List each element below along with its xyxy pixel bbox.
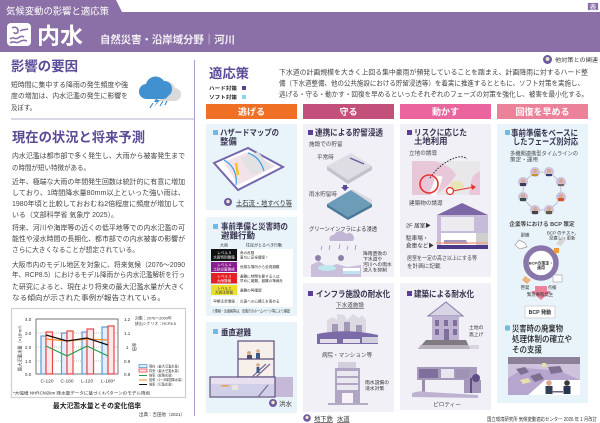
illustration: green infrastructure	[311, 231, 361, 277]
chart axes labels: 1.2	[124, 317, 131, 322]
panel: building flood proofing	[400, 283, 491, 410]
text: status body: さらに大きくなることが想定されている。	[12, 245, 139, 254]
text: status body: 1980年頃と比較しておおむね2倍程度に頻度が増加して	[12, 199, 185, 208]
table: warning levels: 大雨警報	[217, 278, 232, 283]
text: piloti: ピロティー	[433, 402, 461, 408]
panel divider	[194, 60, 196, 416]
panel: phase-based response: したフェーズ別対応	[513, 136, 579, 146]
text: hospital and apartment: 病院・マンション等	[322, 351, 373, 359]
link: subway and water supply: 地下鉄	[314, 414, 334, 423]
chart scenario note	[135, 316, 176, 326]
text: adaptation intro: 下水道の計画規模を大きく上回る集中豪雨が頻発していることを踏まえ、計画降雨に対するハード整	[279, 68, 588, 76]
panel: phase-based response: 策定・運用	[510, 156, 538, 164]
text: normal time: 平常時	[317, 153, 334, 161]
labels: BCP cycle	[521, 230, 579, 298]
panel: phase-based response: その支援	[512, 344, 542, 354]
labels: BCP cycle: 見直し・更新	[549, 234, 576, 242]
chart axes labels: C-180	[60, 378, 74, 384]
table: warning levels: ※警報・注意報等は、気象庁のホームページ等により確認	[212, 308, 290, 314]
panel: causes of impact	[11, 58, 181, 112]
text: adaptation intro	[279, 68, 588, 98]
chart axes labels: 0.9	[124, 359, 131, 364]
labels: BCP cycle: 緊急事態発生	[527, 291, 554, 298]
text: facility storage: 施設での貯留	[309, 140, 343, 148]
panel: preparation and evacuation	[206, 217, 297, 316]
chart axes labels: 0.0	[25, 372, 32, 377]
heading: adaptation measures: 適応策	[209, 66, 249, 81]
box: BCP activation	[525, 306, 555, 318]
chart axes labels: 倍率	[131, 342, 138, 351]
note: rainwater equipment: 雨水設備の	[365, 379, 389, 386]
labels: BCP cycle: 運用	[537, 264, 545, 270]
illustration: flooded building	[210, 341, 293, 397]
panel: infrastructure flood proofing	[303, 283, 394, 412]
labels: BCP cycle: 訓練	[521, 232, 530, 238]
chart source: 出典：吉田他（2021）	[139, 411, 185, 418]
arrow: down	[341, 185, 349, 191]
note: suppress runoff: 降雨直後の	[363, 250, 387, 257]
panel: phase-based response	[497, 124, 588, 403]
header tab label: 気候変動の影響と適応策	[6, 6, 109, 18]
note: plan entry: 居室を一定の高さ以上にする等	[407, 254, 477, 262]
chart axes labels: 2.0	[25, 345, 32, 350]
panel: land use according to risk	[400, 124, 491, 277]
chart legend: 倍率（氾濫水量）	[149, 382, 174, 386]
chart scenario note: 対象：2076～2090年	[135, 316, 172, 320]
text: status body: 内水氾濫は都市部で多く発生し、大雨から被害発生まで	[12, 151, 185, 160]
column headers: 逃げる	[238, 106, 265, 117]
text: status body: いる（文部科学省 気象庁 2025）。	[12, 210, 118, 219]
labels: floors: 駐車場・	[406, 234, 428, 242]
chart title: 最大氾濫水量とその変化倍率	[53, 401, 141, 410]
illustration: piloti building	[412, 367, 481, 398]
title: land use: リスクに応じた	[414, 128, 467, 138]
icon: rain cloud	[139, 77, 181, 108]
link: debris flow: 土石流・地すべり等	[236, 198, 292, 208]
labels: BCP cycle: BCPの策定・	[529, 260, 553, 266]
labels: floors: 倉庫など▶	[406, 242, 434, 250]
chart axes labels: 1	[126, 345, 129, 350]
text: sewer facility: 下水道施設	[336, 301, 364, 309]
panel: land use according to risk: 土地利用	[414, 136, 448, 146]
title: evacuation: 事前準備と災害時の	[221, 222, 288, 232]
text: green infrastructure: グリーンインフラによる浸透	[309, 225, 377, 233]
illustration: dry storage	[327, 153, 372, 184]
text: causes	[11, 80, 128, 112]
illustration: raised ground house	[418, 302, 479, 349]
text: status body: の時間が短い特徴がある。	[12, 163, 90, 172]
panel: phase-based response: 処理体制の確立や	[512, 333, 572, 344]
chart axes labels: L-180*	[101, 378, 115, 384]
illustration: sewage facility	[317, 314, 378, 344]
header band	[0, 0, 600, 52]
heading: current status: 現在の状況と将来予測	[12, 129, 145, 145]
chart legend: 倍率（1～3時間降水量）	[149, 377, 184, 382]
text: status body: 大阪市内のモデル地区を対象に、将来気候（2076～2090	[12, 260, 185, 269]
table: warning levels: 土砂災害警戒	[213, 266, 235, 272]
table: warning levels: 災害への心構えを高める	[240, 298, 280, 304]
table: warning levels	[211, 242, 293, 314]
page side tab	[588, 2, 598, 11]
text: adaptation intro: 逃げる・守る・動かす・回復を早めるといったそれぞれのフェーズの対策を強化し、被害を最小化する。	[279, 90, 588, 98]
chart axes labels: 3.0	[25, 331, 32, 336]
chart legend: 将来（最大氾濫水量）	[149, 368, 181, 373]
subtitle: 自然災害・沿岸域分野｜河川	[100, 33, 235, 46]
legend: hard and soft measures	[209, 85, 246, 101]
panel: coordinated storage and infiltration	[303, 124, 394, 277]
chart legend: 現在（最大氾濫水量）	[149, 364, 181, 368]
link note: relation to other measures: 他対策との関連	[555, 56, 598, 64]
link: flood: 洪水	[279, 399, 292, 408]
text: timeline: 多機関連携型タイムラインの	[510, 150, 578, 158]
chart axes labels: 1.0	[25, 359, 32, 364]
illustration: apartment	[328, 362, 368, 404]
text: status body: 年、RCP8.5）におけるモデル降雨から内水氾濫解析を行っ	[12, 270, 185, 279]
link: subway and water supply	[303, 414, 350, 423]
panel: hazard map	[206, 124, 297, 210]
chart: maximum inundation volume	[12, 308, 186, 398]
chart footnote: *大幅増 NHRCM2km 降水量データに基づく4パターンのモデル降雨	[13, 390, 150, 396]
title: storage: 連携による貯留浸透	[315, 128, 384, 138]
table: warning levels: 危険な場所から全員避難	[240, 264, 280, 269]
link note: relation to other measures	[543, 55, 598, 64]
table: warning levels: 早めに避難、避難の準備を	[240, 278, 284, 283]
panel: land use according to risk: を計画に記載	[407, 262, 441, 270]
text: status body: 能性や浸水時間の長期化、都市部での内水被害の影響が	[12, 234, 185, 243]
title: waste disposal: 災害時の廃棄物	[512, 322, 563, 334]
chart legend	[139, 364, 184, 386]
illustration: debris site and meeting	[508, 357, 580, 395]
chart axes labels: L-120	[81, 378, 93, 384]
illustration: BCP cycle	[515, 236, 566, 300]
illustration: raised-living house	[436, 203, 488, 249]
box: BCP activation: BCP 発動	[529, 308, 551, 316]
text: status body: なる傾向が示された事例が報告されている。	[12, 293, 165, 302]
text: status body	[12, 151, 185, 302]
table: warning levels: レベル 4	[217, 263, 231, 267]
column headers: 回復を早める	[515, 106, 570, 117]
labels: BCP cycle: BCP のテスト、	[547, 230, 579, 236]
table: warning levels: 早期注意情報	[213, 298, 235, 304]
note: suppress runoff: 流入を抑制	[363, 266, 387, 274]
note: raised land: 土地の	[469, 324, 484, 331]
labels: BCP cycle: 点検	[548, 284, 557, 291]
text: location guidance: 立地の誘導	[409, 149, 437, 157]
table: warning levels: レベル 5	[217, 251, 231, 255]
column headers: 動かす	[432, 106, 459, 117]
panel: infrastructure flood proofing: 浸水対策	[365, 385, 384, 392]
chart legend: 倍率（総降水量）	[149, 372, 174, 378]
title: building: 建築による耐水化	[414, 289, 475, 299]
title: infrastructure: インフラ施設の耐水化	[316, 289, 391, 299]
table: warning levels: 住民がとるべき行動	[246, 242, 282, 248]
plot area	[36, 319, 118, 374]
title: hazard map: ハザードマップの	[220, 128, 279, 138]
table: warning levels: 避難に時間を要する人は	[240, 274, 280, 278]
illustration: filled storage	[327, 189, 372, 220]
legend: hard and soft measures: ソフト対策	[209, 94, 237, 101]
legend: hard and soft measures: ハード対策	[209, 85, 237, 92]
table: warning levels: 命の危険	[240, 250, 255, 255]
title: vertical evacuation: 垂直避難	[221, 328, 252, 338]
link: subway and water supply: 水道	[337, 414, 350, 423]
panel: hazard map: 整備	[220, 136, 237, 146]
text: causes: 短時間に集中する降雨の発生頻度や強	[11, 80, 128, 89]
text: status body: しており、1時間降水量80mm以上といった強い雨は、	[12, 188, 185, 197]
chart axes labels: C-120	[40, 378, 54, 384]
title: phase response: 事前準備をベースに	[511, 128, 578, 138]
text: causes: 度の増加は、内水氾濫の発生に影響を	[11, 91, 128, 100]
table: warning levels: 避難の再確認	[240, 288, 262, 292]
illustration: location map	[412, 157, 480, 195]
heading: causes: 影響の要因	[11, 58, 78, 74]
table: warning levels: レベル 2	[217, 286, 231, 290]
table: warning levels: 大雨特別警報	[213, 254, 235, 260]
table: warning levels: 大雨注意報	[215, 290, 233, 294]
labels: floors: 2F 居室▶	[406, 222, 431, 230]
text: status body: た研究によると、現在より将来の最大氾濫水量が大きく	[12, 282, 185, 291]
panel: current status and future	[12, 129, 185, 302]
text: building guidance: 建築物の誘導	[409, 199, 443, 207]
panel: preparation and evacuation: 避難行動	[221, 230, 255, 240]
labels: floors	[406, 222, 434, 250]
chart axes labels: 最大氾濫水量（×10⁶m³）	[16, 323, 24, 371]
illustration: circle of agencies	[518, 167, 566, 215]
note: suppress runoff: 下水道や	[363, 256, 382, 262]
note: suppress runoff	[363, 250, 392, 274]
table: warning levels: 大雨	[220, 242, 228, 248]
chart axes labels	[16, 317, 138, 384]
chart axes labels: 0.8	[124, 372, 131, 377]
table: warning levels: レベル 3	[217, 274, 231, 278]
table: warning levels: 直ちに安全確保！	[240, 254, 269, 260]
chart scenario note: 排出シナリオ：RCP8.5	[135, 321, 176, 326]
text: status body: 近年、極端な大雨の年間発生回数は統計的に有意に増加	[12, 177, 185, 186]
text: adaptation intro: 備（下水道整備、他の公共施設における貯留浸透等）を着実に推進するとともに、ソフト対策を実施し、	[279, 78, 584, 88]
chart axes labels: 1.1	[124, 331, 131, 336]
page side tab: 表	[590, 2, 597, 11]
text: BCP formulation: 企業等における BCP 策定	[509, 220, 575, 228]
icon: inland flooding	[7, 23, 31, 46]
panel: building flood proofing: 嵩上げ	[469, 331, 484, 338]
text: status body: 将来、河川や海岸等の近くの低平地等での内水氾濫の可	[12, 223, 185, 232]
note: suppress runoff: 河川への雨水	[363, 261, 392, 268]
illustration: hazard map	[214, 148, 283, 190]
main title: 内水	[37, 24, 83, 49]
chart axes labels: 4.0	[25, 317, 32, 322]
labels: BCP cycle: 啓発	[521, 284, 530, 291]
text: during rainwater storage: 雨水貯留時	[309, 190, 337, 198]
panel: vertical evacuation	[206, 322, 297, 413]
text: causes: 及ぼす。	[11, 104, 36, 112]
column headers	[206, 104, 588, 119]
column headers: 守る	[339, 106, 358, 117]
